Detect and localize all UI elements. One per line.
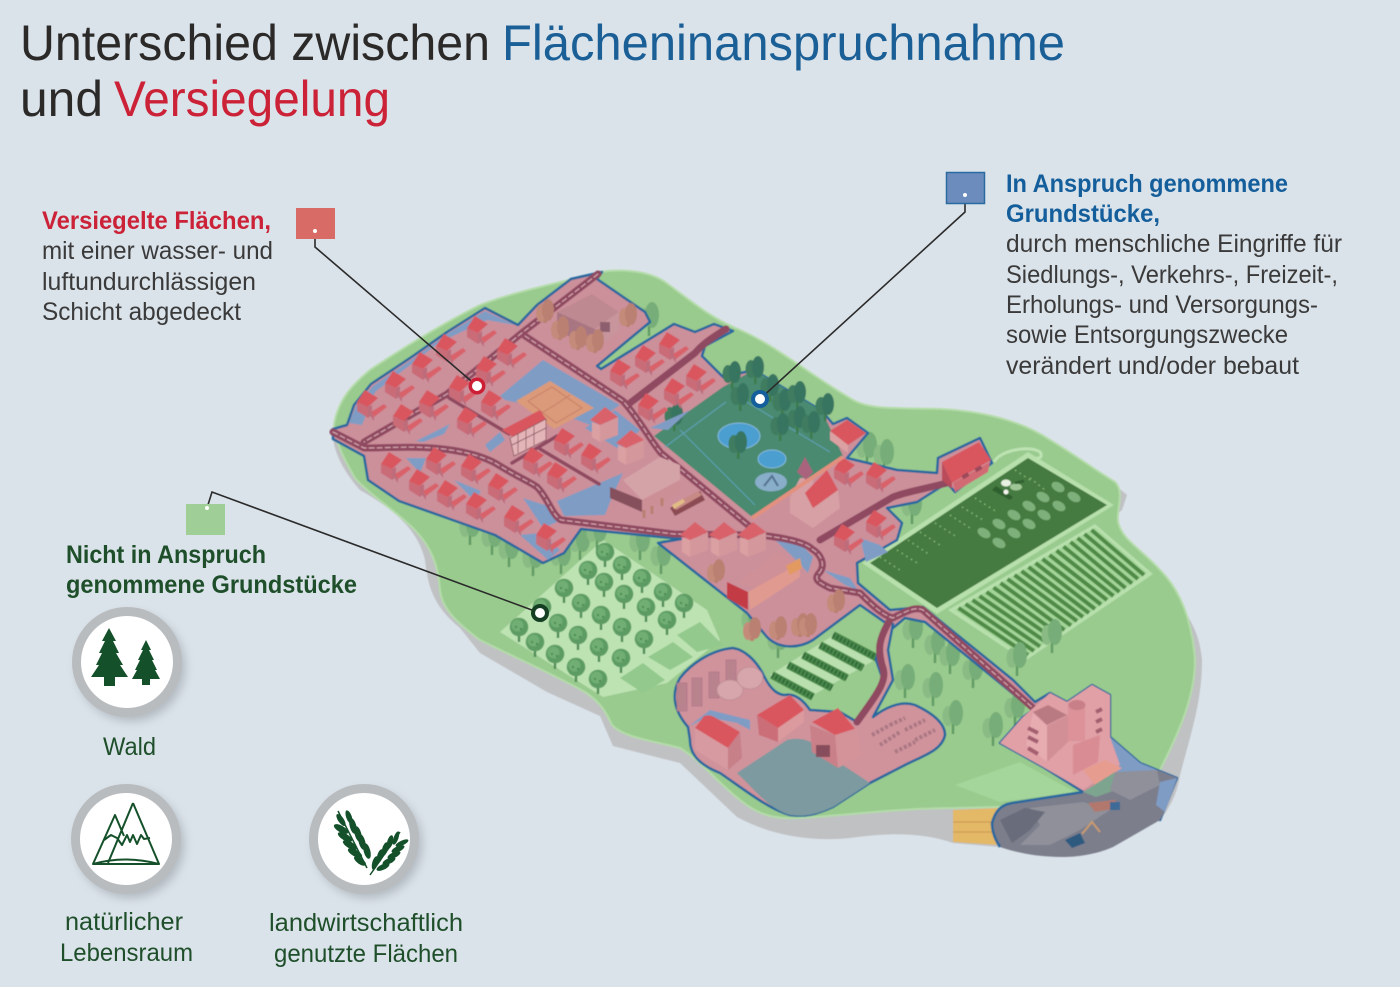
text: claimed land: sowie Entsorgungszwecke [1006,321,1288,349]
island green base [334,270,1195,818]
map illustration [333,270,1202,857]
leader line: claimed land [760,195,965,399]
text: claimed land: In Anspruch genommene [1006,170,1288,198]
sealed area: village and infrastructure [333,272,1177,820]
text: claimed land: durch menschliche Eingriffe für [1006,230,1342,258]
title: Unterschied zwischen [20,15,490,71]
light field: meadow patch [955,762,1075,802]
farm barn middle [757,695,804,742]
sealed area: farm [675,622,945,816]
marker: claimed [751,390,769,408]
title: Versiegelung [114,71,390,127]
legend swatch: sealed [296,208,335,239]
sports court [516,381,594,429]
text: claimed land: Grundstücke, [1006,200,1160,228]
power plant [1000,685,1122,790]
text: unclaimed land: Nicht in Anspruch [66,541,266,569]
community hall [610,457,680,518]
label: agriculture [269,909,463,968]
text: sealed surfaces: luftundurchlässigen [42,268,256,296]
marker: sealed [468,378,486,394]
label: natural habitat: Lebensraum [60,939,193,967]
vegetable squares [620,622,723,693]
silos [677,660,736,711]
sand pit [953,808,1000,845]
factory building [727,553,802,610]
icon: forest [72,607,185,721]
barn at field [942,442,991,492]
farm blue patch [688,710,750,730]
church [790,457,840,528]
title: und [20,71,103,127]
icon: agriculture [309,784,422,898]
label: agriculture: genutzte Flächen [274,940,458,968]
roads [333,274,1033,722]
harvester [992,480,1024,500]
light field: orchard ground [500,540,720,697]
farm pond [737,739,870,816]
houses [357,316,896,555]
legend swatch: claimed [946,172,984,204]
striped crop field [948,524,1153,661]
field path [994,449,1041,462]
text: sealed surfaces: Schicht abgedeckt [42,298,241,326]
text: unclaimed land: genommene Grundstücke [66,571,357,599]
school building [502,410,546,456]
label: agriculture: landwirtschaftlich [269,909,463,937]
text: unclaimed land [66,541,357,599]
text: sealed surfaces [42,207,273,326]
vegetable beds [770,633,880,698]
text: claimed land: verändert und/oder bebaut [1006,352,1299,380]
leader line: sealed surfaces [315,231,477,386]
shed at park edge [830,420,866,453]
wheat field with bales [862,452,1114,614]
orchard trees [510,543,693,694]
storage tanks [717,667,763,700]
text: sealed surfaces: mit einer wasser- und [42,237,273,265]
unsealed park [654,356,843,517]
bus [670,491,705,516]
farm barn left [695,715,742,770]
marker: unclaimed [531,604,549,622]
title: Flächeninanspruchnahme [502,15,1065,71]
orange border strip [752,457,843,518]
text: claimed land [1006,170,1342,380]
leader line: unclaimed land [207,492,540,613]
warehouse plot [536,294,637,353]
title [20,15,1065,127]
trees inside sealed area [707,559,845,641]
text: claimed land: Erholungs- und Versorgungs- [1006,291,1318,319]
greenhouses [872,718,935,752]
apartment blocks [590,407,766,557]
farm barn right [810,708,862,768]
quarry [992,770,1177,857]
label: forest: Wald [103,733,156,761]
trees on unsealed land [460,302,1062,746]
island shadow [333,380,1202,857]
legend swatch: unclaimed [186,504,225,535]
label: natural habitat: natürlicher [65,908,183,936]
blue unpaved patches [349,311,1177,800]
text: sealed surfaces: Versiegelte Flächen, [42,207,271,235]
text: claimed land: Siedlungs-, Verkehrs-, Freizeit-, [1006,261,1338,289]
icon: natural habitat [71,784,184,898]
label: natural habitat [60,908,193,967]
